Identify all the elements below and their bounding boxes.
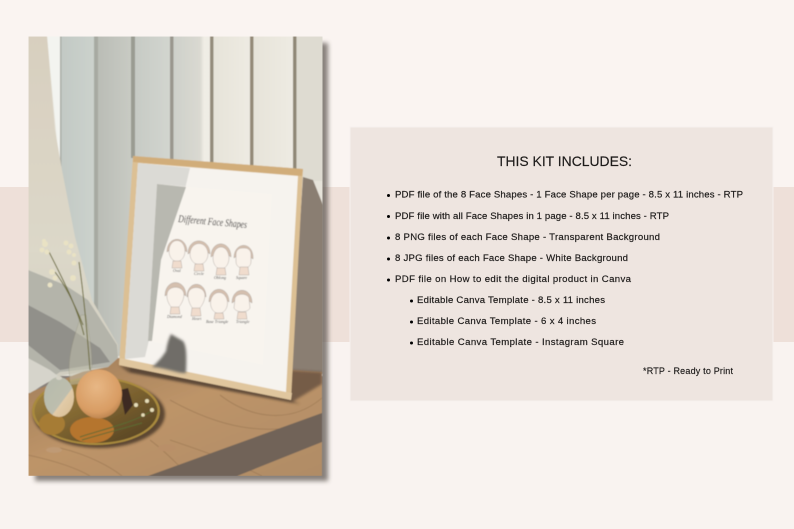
plant shadow on print [152,334,186,373]
gold tray [32,377,165,448]
face 2: Circle [194,271,204,276]
face 6: Heart [191,316,202,321]
face shapes [165,239,253,324]
glass vase [69,315,92,385]
sub item 1: Editable Canva Template - 8.5 x 11 inches [417,295,605,306]
mat shadow [125,163,190,359]
small ceramic vase [44,376,74,417]
face 3: Oblong [214,275,226,280]
heading: THIS KIT INCLUDES: [497,153,632,169]
item 3: 8 PNG files of each Face Shape - Transparent Background [395,232,660,243]
print [155,186,185,313]
bright window strip [47,36,60,175]
sub item 3: Editable Canva Template - Instagram Square [417,337,624,348]
item 1: PDF file of the 8 Face Shapes - 1 Face Shape per page - 8.5 x 11 inches - RTP [395,190,743,200]
info panel: this kit includes [350,127,773,401]
photo shadow [35,43,328,481]
wooden sphere [76,370,122,418]
white mat [125,163,298,392]
wooden frame [119,156,303,400]
picture frame [119,156,303,404]
frame shadow [119,365,300,404]
face 7: Base Triangle [206,319,229,324]
floor shadow band [148,413,322,476]
face 1: Oval [173,268,182,273]
face 5: Diamond [166,314,183,319]
photo: framed print on a table [28,36,324,476]
print title: Different Face Shapes [177,214,247,231]
item 5: PDF file on How to edit the digital product in Canva [395,274,632,285]
dried flowers in vase [40,239,90,370]
fallen flower sprig on tray [80,399,154,440]
item 4: 8 JPG files of each Face Shape - White Background [395,253,628,264]
panel background [350,127,773,401]
floor [28,358,322,476]
footnote: *RTP - Ready to Print [643,366,733,376]
item 2: PDF file with all Face Shapes in 1 page - 8.5 x 11 inches - RTP [395,211,669,222]
wall shadow right of frame [290,177,323,374]
face 4: Square [236,275,247,280]
sub item 2: Editable Canva Template - 6 x 4 inches [417,316,596,327]
curtain [28,36,118,393]
wall panels [28,36,324,376]
face 8: Triangle [236,319,250,324]
